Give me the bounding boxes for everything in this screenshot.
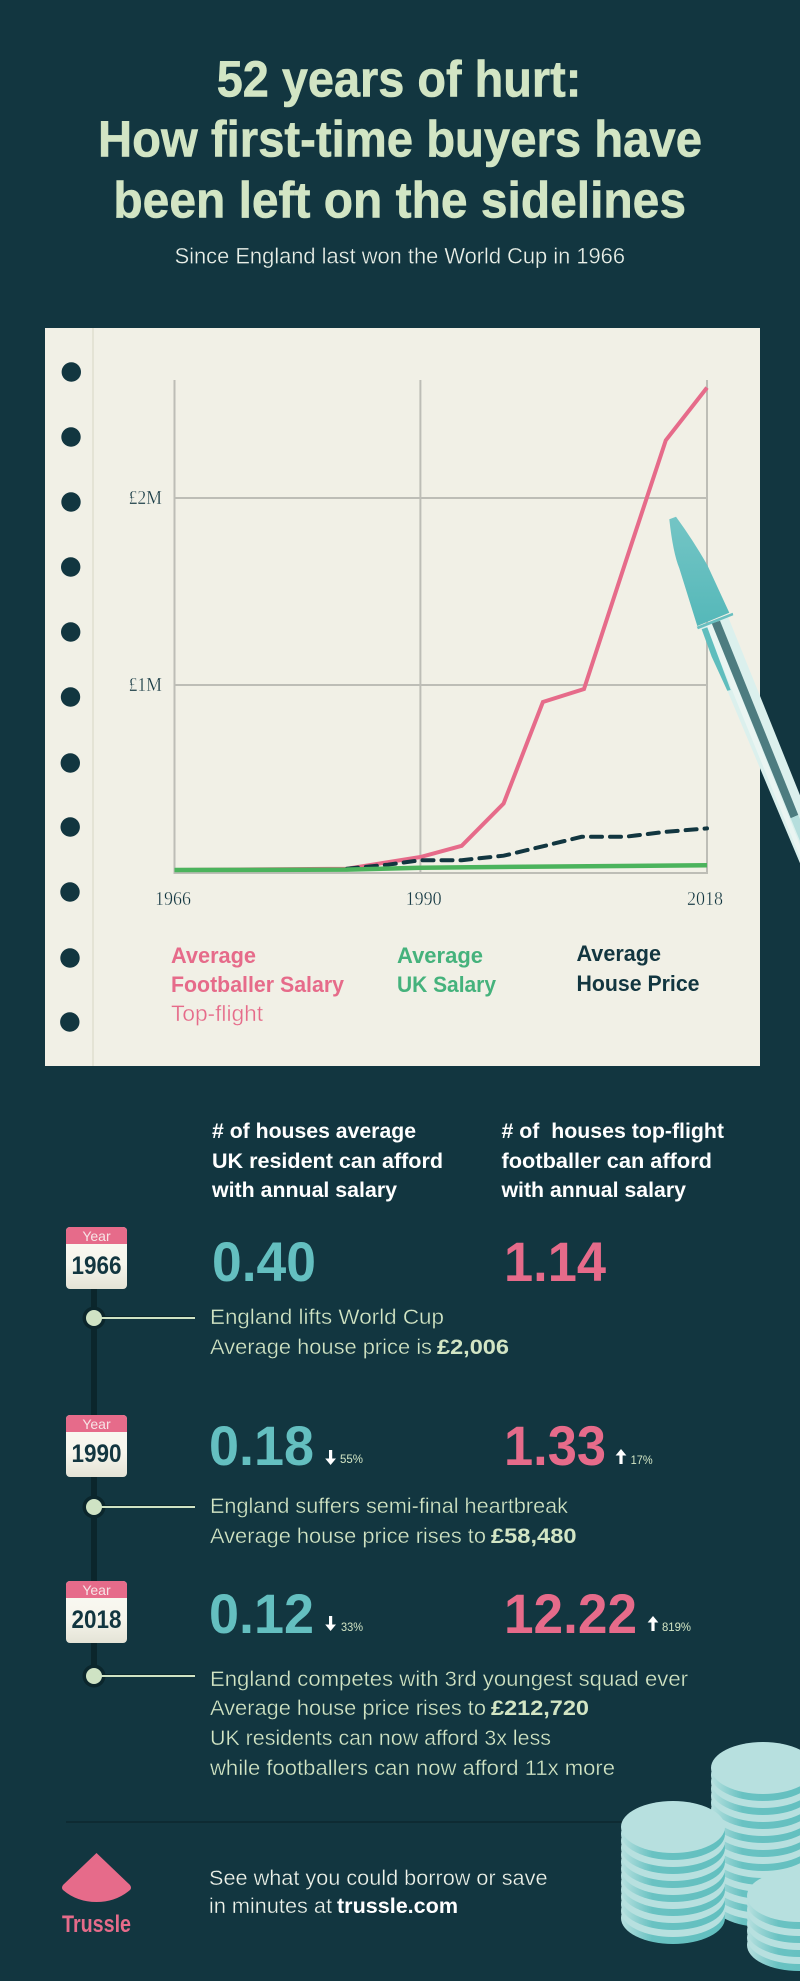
change: footballer 1990: 17% xyxy=(631,1453,653,1467)
timeline marker: 2018 xyxy=(82,1664,195,1688)
change: uk 2018 xyxy=(325,1616,363,1634)
change: footballer 2018 xyxy=(648,1616,691,1634)
legend: uk salary xyxy=(397,943,496,997)
description: 1966 xyxy=(210,1305,509,1359)
description: 2018: UK residents can now afford 3x less xyxy=(210,1726,551,1750)
x axis labels xyxy=(155,888,723,910)
calendar: 1990: 1990 xyxy=(72,1440,122,1468)
coin stack: middle xyxy=(621,1801,725,1944)
coin stack: front xyxy=(747,1870,800,1971)
stat: uk 1966: 0.40 xyxy=(212,1230,316,1293)
icon: pen xyxy=(669,517,800,887)
calendar: 1966: Year xyxy=(82,1228,111,1244)
stat: uk 2018: 0.12 xyxy=(209,1582,314,1645)
title: 52 years of hurt: xyxy=(217,51,581,108)
legend: footballer salary: Top-flight xyxy=(171,1001,264,1026)
footballer salary line xyxy=(174,388,707,870)
stat: footballer 1990: 1.33 xyxy=(504,1414,606,1477)
change: uk 2018: 33% xyxy=(341,1620,363,1634)
panel: notebook paper chart xyxy=(45,328,760,1066)
description: 1990: Average house price rises to xyxy=(210,1524,486,1548)
calendar: 2018 xyxy=(66,1581,127,1643)
title: been left on the sidelines xyxy=(113,172,686,229)
call to action: See what you could borrow or save xyxy=(209,1866,548,1890)
logo: Trussle: Trussle xyxy=(62,1911,131,1938)
call to action: in minutes at xyxy=(209,1894,332,1918)
description: 1990: England suffers semi-final heartbreak xyxy=(210,1494,568,1518)
description: 2018: £212,720 xyxy=(491,1696,589,1720)
icon: coin stacks xyxy=(621,1742,800,1971)
x axis labels: 1966 xyxy=(155,888,191,910)
title: How first-time buyers have xyxy=(98,111,702,168)
timeline marker: 1966 xyxy=(82,1306,195,1330)
stat: footballer 1966: 1.14 xyxy=(504,1230,606,1293)
column header: footballer: footballer can afford xyxy=(502,1150,712,1173)
timeline marker: 1990 xyxy=(82,1496,195,1518)
column header: uk resident: with annual salary xyxy=(211,1179,397,1202)
calendar: 1966 xyxy=(66,1227,127,1289)
legend: uk salary: Average xyxy=(397,943,483,968)
column header: uk resident xyxy=(211,1120,443,1202)
stat: uk 1990: 0.18 xyxy=(209,1414,314,1477)
description: 2018: Average house price rises to xyxy=(210,1696,486,1720)
call to action xyxy=(209,1866,548,1918)
legend: footballer salary xyxy=(171,943,344,1026)
legend: uk salary: UK Salary xyxy=(397,972,496,997)
calendar: 1990 xyxy=(66,1415,127,1477)
uk salary line xyxy=(174,865,707,870)
y axis labels: £1M xyxy=(129,674,162,696)
change: footballer 1990 xyxy=(616,1449,653,1467)
coin stack: back xyxy=(711,1742,800,1927)
column header: footballer xyxy=(500,1120,724,1202)
change: uk 1990 xyxy=(325,1450,363,1466)
timeline line xyxy=(91,1280,97,1676)
house price dashed line xyxy=(347,828,707,869)
y axis labels xyxy=(129,487,162,696)
description: 2018: while footballers can now afford 11x more xyxy=(209,1756,615,1780)
legend: house price: House Price xyxy=(576,971,700,996)
legend: footballer salary: Average xyxy=(171,943,256,968)
column header: uk resident: UK resident can afford xyxy=(212,1150,443,1173)
x axis labels: 2018 xyxy=(687,888,723,910)
description: 1966: £2,006 xyxy=(437,1335,509,1359)
legend: house price: Average xyxy=(576,941,661,966)
column header: uk resident: # of houses average xyxy=(212,1120,416,1143)
notebook holes xyxy=(60,362,81,1032)
description: 2018 xyxy=(209,1667,688,1780)
change: footballer 2018: 819% xyxy=(662,1620,691,1634)
calendar: 1966: 1966 xyxy=(72,1252,122,1280)
call to action: trussle.com xyxy=(337,1894,458,1918)
legend: footballer salary: Footballer Salary xyxy=(171,972,344,997)
calendar: 2018: 2018 xyxy=(72,1606,122,1634)
description: 1990: £58,480 xyxy=(491,1524,577,1548)
logo: Trussle xyxy=(62,1853,131,1938)
line chart xyxy=(129,380,723,910)
x axis labels: 1990 xyxy=(406,888,442,910)
description: 1966: England lifts World Cup xyxy=(210,1305,444,1329)
y axis labels: £2M xyxy=(129,487,162,509)
description: 2018: England competes with 3rd youngest squad ever xyxy=(210,1667,688,1691)
calendar: 2018: Year xyxy=(82,1582,111,1598)
stat: footballer 2018: 12.22 xyxy=(504,1582,637,1645)
column header: footballer: # of houses top-flight xyxy=(502,1120,724,1143)
description: 1966: Average house price is xyxy=(210,1335,432,1359)
column header: footballer: with annual salary xyxy=(500,1179,686,1202)
legend: house price xyxy=(576,941,700,996)
title xyxy=(98,51,702,229)
change: uk 1990: 55% xyxy=(340,1452,363,1466)
calendar: 1990: Year xyxy=(82,1416,111,1432)
subtitle: Since England last won the World Cup in 1966 xyxy=(175,243,625,268)
description: 1990 xyxy=(210,1494,577,1548)
